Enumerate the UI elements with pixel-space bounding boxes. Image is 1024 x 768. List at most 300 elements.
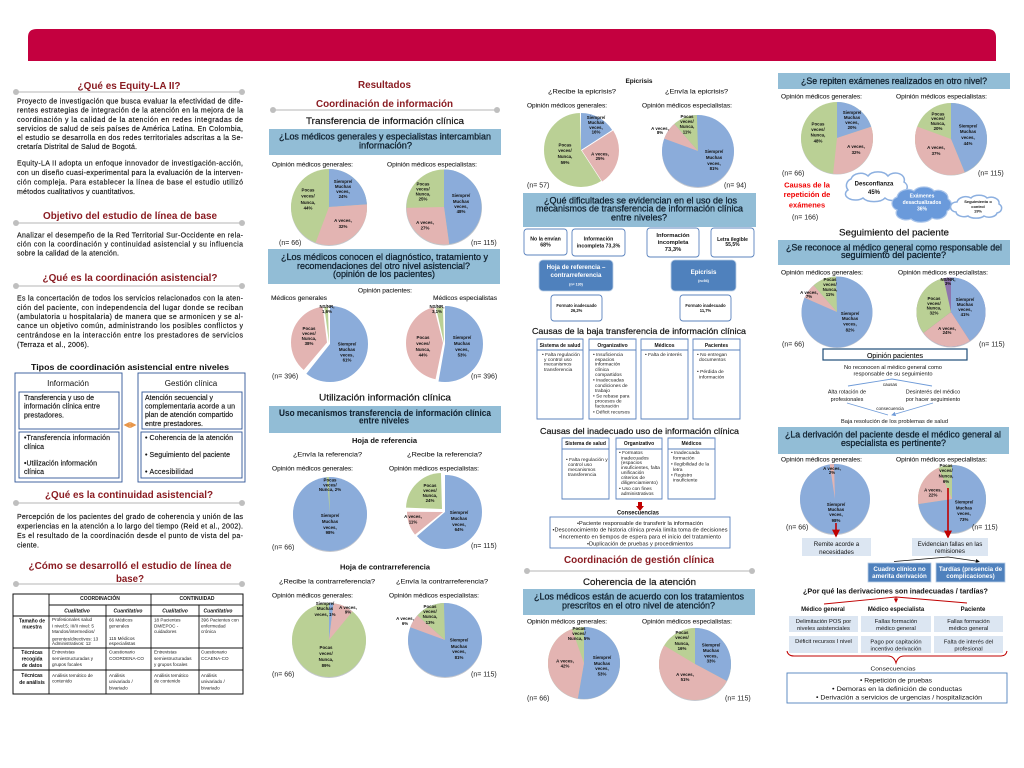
pie chart: envía la contrarreferencia: Siempre/ — [450, 638, 469, 642]
pie chart: recibe la referencia: veces/ — [423, 488, 437, 493]
diagram: tipos de coordinación — [15, 362, 245, 482]
pie chart: exámenes generales: veces, — [845, 120, 859, 125]
panel: causas baja transferencia: procesos de — [595, 398, 622, 404]
table: metodología: Tamaño de — [19, 618, 45, 624]
diagram: opinión pacientes: Alta rotación de — [828, 390, 866, 396]
panel: información: •Transferencia información — [24, 435, 110, 442]
pie chart: envía la epicrisis: ¿Envía la epicrisis? — [665, 88, 728, 96]
pie chart: médicos especialistas pacientes: 3,1% — [432, 309, 442, 314]
callout: causas de la repetición: (n= 166) — [792, 214, 818, 222]
panel: consecuencias derivación: Consecuencias — [870, 666, 916, 672]
panel: causas baja transferencia: Sistema de salud — [540, 343, 580, 349]
table: metodología: gerentes/directivos: 13 — [52, 636, 99, 642]
panel: razones — [789, 607, 1003, 653]
pie chart: médicos generales pacientes: Nunca, — [302, 336, 316, 341]
diagram: dificultades epicrisis: Letra ilegible — [717, 237, 748, 243]
pie chart: seguimiento especialistas: 32% — [930, 310, 938, 316]
pie chart: médicos especialistas pacientes: veces/ — [416, 341, 430, 346]
callout: remite acorde: necesidades — [819, 549, 854, 556]
arrow: red down especialista — [947, 488, 949, 537]
panel: razones: Paciente — [961, 607, 986, 613]
pie chart: envía la epicrisis: veces/ — [680, 119, 694, 124]
pie chart: seguimiento especialistas: 41% — [961, 312, 969, 317]
column 2: resultados — [268, 79, 501, 678]
panel: causas inadecuado uso: unificación — [621, 470, 644, 476]
diagram: opinión pacientes: Baja resolución de los problemas de salud — [841, 419, 948, 425]
pie chart: coherencia generales: 53% — [598, 672, 606, 676]
pie chart: envía la referencia — [272, 452, 367, 552]
pie chart: exámenes especialistas: 20% — [934, 126, 942, 131]
text block: Equity-LA II description — [17, 98, 244, 196]
pie chart: envía la epicrisis: veces, — [707, 161, 721, 166]
diagram: dificultades hoja de referencia: contrarreferencia — [551, 272, 602, 279]
heading: Qué es Equity-LA II: ¿Qué es Equity-LA II? — [78, 80, 180, 92]
pie chart: seguimiento generales: Siempre/ — [841, 311, 860, 316]
pie chart: envía la referencia: Pocas — [324, 478, 337, 482]
heading: Qué es Equity-LA II — [13, 80, 245, 95]
diagram: opinión pacientes: No reconocen al médico general como — [844, 365, 942, 371]
table: metodología: 66 Médicos — [109, 618, 133, 622]
panel: causas baja transferencia: • Pérdida de — [697, 369, 724, 375]
pie chart: médicos generales pacientes: Siempre/ — [338, 342, 357, 346]
diagram: dificultades epicrisis — [647, 228, 754, 321]
pie chart: médicos especialistas pacientes: Siempre/ — [453, 335, 472, 340]
pie chart: exámenes generales — [781, 94, 873, 178]
pie chart: coherencia especialistas: Muchas — [703, 648, 720, 653]
pie chart: médicos especialistas intercambio: veces, — [454, 204, 468, 209]
heading: resultados: Resultados — [358, 79, 411, 91]
heading: objetivo: Objetivo del estudio de línea de base — [43, 210, 217, 222]
pie chart: recibe la epicrisis: Siempre/ — [587, 115, 606, 120]
diagram: opinión pacientes: por hacer seguimiento — [906, 397, 960, 403]
pie chart: exámenes generales: Siempre/ — [843, 110, 862, 115]
box: tardías: complicaciones) — [946, 573, 995, 580]
pie chart: recibe la referencia: Nunca, — [423, 493, 437, 498]
panel: causas baja transferencia: • Déficit recursos — [593, 410, 630, 416]
callout: causas de la repetición — [784, 180, 831, 222]
pie chart: derivación generales: 2% — [829, 470, 835, 475]
pie chart: coherencia generales: Siempre/ — [593, 655, 612, 660]
heading: cómo se desarrolló: base? — [116, 573, 144, 585]
callout: remite acorde: Remite acorde a — [814, 541, 860, 548]
column 3: epicrisis y causas — [523, 78, 756, 702]
label: hoja de referencia: Hoja de referencia — [352, 438, 417, 445]
cloud: exámenes desactualizados: desactualizados — [903, 200, 942, 206]
pie chart: recibe la epicrisis: Pocas — [559, 142, 572, 148]
text block: objetivo: ción con la coordinación y continuidad asistencial y su influencia — [17, 242, 243, 248]
pie chart: envía la referencia: 98% — [326, 530, 334, 535]
pie chart: recibe la referencia: ¿Recibe la referencia? — [407, 452, 482, 458]
pie chart: exámenes generales: A veces, — [847, 144, 865, 149]
panel: conocen diagnóstico: (opinión de los pacientes) — [333, 269, 435, 279]
panel: causas baja transferencia: • Falta regulación — [542, 352, 580, 358]
heading: por qué inadecuadas: ¿Por qué las derivaciones son inadecuadas / tardías? — [803, 586, 988, 596]
diagram: tipos de coordinación: Tipos de coordinación asistencial entre niveles — [31, 362, 229, 372]
table: metodología: semiestructuradas — [154, 656, 192, 661]
cloud: seguimiento o control — [950, 195, 1002, 218]
pie chart: derivación especialistas: veces/ — [939, 468, 953, 473]
cloud: desconfianza — [845, 172, 907, 202]
pie chart: envía la epicrisis: Opinión médicos especialistas: — [642, 102, 732, 110]
panel: causas baja transferencia: documentos — [699, 357, 726, 363]
table: metodología: Cuestionario — [109, 650, 135, 654]
subheading: causas baja transferencia: Causas de la baja transferencia de información clínica — [532, 326, 746, 336]
text block: Equity-LA II description: servicios de salud de seis países de América Latina. En Colombia, — [17, 126, 243, 133]
pie chart: recibe la referencia: veces, — [452, 522, 466, 527]
pie chart: seguimiento especialistas: A veces, — [938, 326, 956, 331]
table: metodología: Cuantitativo — [204, 608, 232, 614]
table: metodología: univariado / — [201, 679, 225, 684]
table: metodología: bivariado — [109, 686, 128, 690]
table: metodología: de análisis — [19, 680, 45, 686]
pie chart: médicos generales intercambio: Muchas — [335, 184, 352, 189]
pie chart: coherencia generales — [527, 618, 620, 702]
table: metodología: generales — [109, 624, 130, 628]
pie chart: médicos generales intercambio: A veces, — [334, 218, 352, 223]
column 4: exámenes, seguimiento, derivación — [778, 73, 1010, 703]
pie chart: derivación especialistas: Muchas — [956, 506, 973, 510]
panel: de acuerdo tratamientos: ¿Los médicos están de acuerdo con los tratamientos — [534, 592, 744, 602]
panel: dificultades — [523, 193, 756, 227]
panel: causas inadecuado uso: diligenciamiento) — [621, 480, 658, 486]
pie chart: derivación generales: A veces, — [823, 466, 841, 471]
panel: causas baja transferencia: Pacientes — [705, 343, 728, 349]
pie chart: recibe la epicrisis: Nunca, — [558, 154, 572, 159]
pie chart: coherencia generales: (n= 66) — [527, 696, 549, 702]
pie chart: médicos generales pacientes: Médicos generales — [271, 295, 328, 302]
panel: se reconoce: seguimiento del paciente? — [841, 250, 946, 260]
text block: coordinación asistencial: (ambulatoria u hospitalaria) de manera que se armonicen y se al- — [17, 314, 244, 321]
diagram: dificultades epicrisis: Información — [656, 233, 690, 239]
label: epicrisis: Epicrisis — [625, 78, 653, 85]
panel: uso mecanismos: entre niveles — [359, 416, 409, 426]
callout: causas de la repetición: Causas de la — [784, 180, 831, 190]
pie chart: recibe la epicrisis: 25% — [596, 156, 604, 161]
text block: Equity-LA II description: cretaría Distrital de Salud de Bogotá. — [17, 144, 137, 151]
cloud: desconfianza: Desconfianza — [855, 182, 894, 188]
text block: Equity-LA II description: rentes estrategias de integración de la atención en la mejora de la — [17, 108, 243, 115]
panel: información: información clínica entre — [24, 404, 100, 410]
panel: causas inadecuado uso — [562, 438, 715, 499]
pie chart: seguimiento especialistas: 3% — [945, 281, 951, 286]
panel: gestión clínica: entre prestadores. — [145, 421, 203, 428]
text block: Equity-LA II description: Proyecto de investigación que busca evaluar la efectividad de dife- — [17, 98, 244, 106]
table: metodología: Profesionales salud — [52, 617, 93, 622]
panel: conocen diagnóstico: ¿Los médicos conocen el diagnóstico, tratamiento y — [281, 252, 488, 262]
pie chart: médicos especialistas intercambio: Siempre/ — [452, 193, 471, 198]
panel: causas baja transferencia: y control uso — [544, 357, 572, 363]
table: metodología: bivariado — [201, 686, 220, 690]
pie chart: coherencia especialistas: (n= 115) — [725, 696, 751, 702]
pie chart: derivación generales: veces, — [829, 512, 843, 517]
panel: conocen diagnóstico — [268, 249, 500, 284]
pie chart: seguimiento especialistas: Nunca, — [927, 306, 941, 310]
pie chart: recibe la referencia: (n= 115) — [471, 543, 497, 550]
heading: objetivo — [13, 210, 245, 226]
table: metodología: Análisis — [109, 673, 126, 678]
pie chart: seguimiento generales: (n= 66) — [782, 342, 804, 348]
panel: consecuencias derivación: • Demoras en la definición de conductas — [832, 686, 963, 693]
pie chart: médicos especialistas intercambio: Pocas — [417, 182, 430, 186]
heading: coordinación de información: Coordinación de información — [316, 98, 453, 110]
pie chart: médicos especialistas intercambio: 48% — [457, 209, 465, 214]
pie chart: derivación especialistas — [896, 456, 998, 534]
panel: de acuerdo tratamientos: prescritos en el otro nivel de atención? — [562, 600, 715, 610]
table: metodología: COORDENA-CO — [109, 656, 144, 661]
table: metodología: Cuestionario — [201, 650, 227, 654]
pie chart: médicos especialistas pacientes: 44% — [419, 352, 427, 358]
pie chart: médicos especialistas intercambio: A veces, — [416, 220, 434, 225]
pie chart: coherencia especialistas: 16% — [678, 646, 686, 651]
pie chart: exámenes especialistas: 37% — [932, 151, 940, 156]
diagram: dificultades epicrisis: (n=94) — [698, 279, 710, 283]
panel: causas inadecuado uso: control uso — [568, 462, 592, 468]
table: metodología: cuidadores — [154, 629, 177, 634]
pie chart: derivación generales: Opinión médicos generales: — [781, 456, 862, 464]
heading: coordinación de información — [270, 98, 500, 113]
pie chart: exámenes generales: (n= 66) — [782, 170, 804, 178]
pie chart: recibe la contrarreferencia: veces, 1% — [314, 612, 336, 617]
pie chart: coherencia generales: veces/ — [572, 631, 586, 636]
panel: causas inadecuado uso: • Uso con fines — [619, 486, 652, 492]
panel: conocen diagnóstico: recomendaciones del otro nivel asistencial? — [297, 261, 470, 271]
callout: evidencian fallas: remisiones — [935, 548, 965, 555]
pie chart: envía la epicrisis — [642, 88, 746, 190]
subheading: seguimiento: Seguimiento del paciente — [839, 228, 949, 238]
panel: se reconoce: ¿Se reconoce al médico general como responsable del — [786, 242, 1002, 252]
pie chart: exámenes especialistas: veces/ — [931, 116, 945, 121]
pie chart: derivación especialistas: Opinión médicos especialistas: — [896, 456, 987, 464]
pie chart: envía la contrarreferencia: A veces, — [396, 616, 414, 621]
panel: consecuencias: •Duplicación de pruebas y procedimientos — [587, 542, 693, 548]
panel: causas baja transferencia: • Insuficiencia — [593, 352, 623, 358]
table: metodología: contenido — [52, 678, 72, 684]
text block: objetivo: sobre la calidad de la atención. — [17, 250, 119, 258]
table: metodología: Análisis temático — [154, 673, 189, 678]
pie chart: derivación generales: (n= 66) — [786, 524, 808, 532]
cloud: exámenes desactualizados: Exámenes — [910, 194, 935, 200]
panel: derivación pertinente: ¿La derivación del paciente desde el médico general al — [785, 430, 1001, 440]
pie chart: envía la contrarreferencia: veces, — [452, 649, 466, 654]
pie chart: exámenes especialistas: Pocas — [932, 112, 945, 116]
panel: razones: profesional — [954, 646, 983, 652]
pie chart: recibe la contrarreferencia — [272, 578, 375, 678]
box: cuadro clínico: Cuadro clínico no — [873, 566, 926, 573]
callout: causas de la repetición: repetición de — [784, 190, 830, 199]
pie chart: exámenes especialistas: 44% — [964, 141, 972, 146]
table: metodología: I nivel:5; III/II nivel: 5 — [52, 624, 94, 628]
diagram: dificultades hoja de referencia: (n= 130) — [569, 282, 584, 286]
table: metodología: DM/EPOC - — [154, 624, 179, 628]
pie chart: médicos especialistas intercambio: 25% — [419, 196, 427, 202]
pie chart: seguimiento especialistas: veces, — [958, 307, 972, 312]
heading: coordinación asistencial: ¿Qué es la coordinación asistencial? — [42, 272, 218, 284]
panel: razones: Médico especialista — [868, 607, 925, 613]
panel: consecuencias: Consecuencias — [617, 510, 660, 516]
table: metodología: Análisis — [201, 673, 218, 678]
panel: información: clínica — [24, 469, 44, 476]
panel: se reconoce — [778, 240, 1010, 265]
pie chart: médicos especialistas intercambio: veces/ — [416, 186, 430, 192]
pie chart: coherencia especialistas: Pocas — [676, 630, 689, 635]
pie chart: exámenes generales: Nunca, — [811, 132, 825, 138]
pie chart: médicos generales intercambio: (n= 66) — [279, 240, 301, 247]
panel: información: prestadores. — [24, 412, 64, 420]
box: tardías: Tardías (presencia de — [939, 566, 1003, 573]
panel: causas baja transferencia: condiciones de — [595, 383, 628, 389]
table: metodología: de datos — [22, 663, 42, 669]
table: metodología: COORDINACIÓN — [80, 594, 120, 602]
panel: gestión clínica: complementaria acorde a un — [145, 404, 235, 410]
pie chart: envía la referencia: veces/ — [323, 482, 337, 488]
pie chart: derivación especialistas: 6% — [943, 479, 949, 484]
text block: Equity-LA II description: métodos cualitativos y cuantitativos. — [17, 189, 135, 196]
pie chart: seguimiento especialistas: 24% — [943, 330, 951, 335]
panel: causas inadecuado uso: insuficiente — [673, 478, 698, 484]
panel: consecuencias derivación: • Repetición de pruebas — [860, 678, 933, 684]
panel: gestión clínica: • Accesibilidad — [145, 469, 193, 476]
pie chart: médicos generales pacientes: Pocas — [303, 326, 316, 331]
pie chart: derivación especialistas: Nunca, — [939, 474, 953, 478]
label: opinión pacientes: Opinión pacientes: — [358, 288, 412, 294]
panel: uso mecanismos — [269, 406, 501, 433]
pie chart: recibe la epicrisis: Opinión médicos generales: — [527, 102, 607, 110]
panel: consecuencias: •Paciente responsable de transferir la información — [577, 521, 703, 527]
panel: dificultades: ¿Qué dificultades se evidencian en el uso de los — [544, 196, 737, 206]
callout: evidencian fallas: Evidencian fallas en las — [918, 541, 982, 548]
pie chart: médicos especialistas pacientes: Nunca, — [416, 347, 430, 352]
text block: continuidad: experiencias en la atención a lo largo del tiempo (Reid et al., 2002). — [17, 524, 243, 530]
table: metodología: univariado / — [109, 679, 133, 684]
pie chart: médicos generales intercambio: Pocas — [302, 188, 315, 192]
pie chart: recibe la referencia: 64% — [455, 527, 463, 532]
panel: razones: incentivo derivación — [871, 646, 921, 652]
pie chart: coherencia generales: Nunca, 5% — [568, 636, 590, 641]
panel: causas inadecuado uso: mecanismos — [568, 467, 596, 473]
text block: continuidad: ciente. — [17, 542, 39, 550]
heading: coordinación asistencial — [13, 272, 245, 289]
diagram: dificultades hoja de referencia: Información — [584, 236, 613, 242]
pie chart: derivación especialistas: Pocas — [940, 463, 953, 468]
table: metodología: muestra — [22, 624, 42, 630]
panel: de acuerdo tratamientos — [523, 589, 755, 615]
pie chart: envía la referencia: Opinión médicos generales: — [272, 466, 353, 472]
pie chart: exámenes generales: 20% — [848, 125, 856, 130]
cloud: seguimiento o control: 19% — [974, 208, 982, 214]
pie chart: exámenes generales: Muchas — [844, 115, 861, 120]
heading: cómo se desarrolló — [13, 560, 245, 587]
box: cuadro clínico: amerita derivación — [872, 573, 927, 580]
pie chart: envía la contrarreferencia: Nunca, — [423, 614, 437, 619]
panel: consecuencias: •Desconocimiento de historia clínica previa limita toma de decisiones — [552, 528, 728, 534]
panel: derivación pertinente: especialista es pertinente? — [841, 438, 946, 448]
pie chart: envía la epicrisis: 11% — [683, 130, 691, 134]
pie chart: envía la contrarreferencia: ¿Envía la contrarreferencia? — [396, 578, 488, 586]
panel: gestión clínica: Gestión clínica — [165, 379, 218, 388]
table: metodología — [13, 594, 243, 694]
pie chart: recibe la referencia: A veces, — [404, 514, 422, 519]
pie chart: recibe la epicrisis: A veces, — [591, 152, 609, 156]
pie chart: seguimiento generales: Pocas — [824, 277, 837, 282]
pie chart: médicos generales intercambio: 24% — [339, 194, 347, 199]
pie chart: envía la contrarreferencia: (n= 115) — [471, 672, 497, 678]
pie chart: médicos especialistas pacientes: Muchas — [454, 341, 471, 346]
pie chart: envía la epicrisis: Nunca, — [680, 124, 694, 129]
pie chart: derivación generales: Siempre/ — [827, 502, 846, 507]
pie chart: derivación generales: 98% — [832, 518, 840, 523]
panel: causas baja transferencia: • Se rebase para — [593, 394, 630, 400]
panel: razones: médico general — [949, 626, 988, 632]
pie chart: seguimiento generales: veces/ — [823, 282, 837, 287]
pie chart: coherencia generales: Muchas — [594, 661, 611, 666]
text block: Equity-LA II description: ción compleja. Para establecer la línea de base el estudio utilizó — [17, 180, 243, 186]
pie chart: médicos especialistas pacientes — [416, 295, 498, 380]
pie chart: seguimiento generales: 82% — [846, 328, 854, 332]
box: cuadro clínico — [868, 563, 931, 582]
pie chart: médicos generales intercambio — [272, 162, 367, 247]
pie chart: envía la epicrisis: Pocas — [681, 114, 694, 119]
panel: información — [15, 373, 122, 482]
header bar — [28, 29, 996, 61]
panel: causas baja transferencia: transferencia — [544, 367, 573, 373]
table: metodología: especialistas — [109, 641, 136, 646]
pie chart: coherencia especialistas: Opinión médicos especialistas: — [642, 618, 732, 626]
pie chart: recibe la contrarreferencia: ¿Recibe la contrarreferencia? — [279, 578, 375, 586]
panel: razones: Falta de interés del — [944, 640, 993, 646]
pie chart: envía la referencia: Nunca, 2% — [319, 487, 341, 492]
panel: causas inadecuado uso: inadecuados — [621, 456, 649, 462]
panel: causas baja transferencia: compartidos — [595, 372, 622, 378]
cloud: exámenes desactualizados: 36% — [917, 206, 928, 212]
panel: causas inadecuado uso: transferencia — [568, 472, 597, 478]
panel: causas baja transferencia: Médicos — [654, 343, 675, 349]
diagram: dificultades hoja de referencia: Formato inadecuado — [556, 303, 597, 308]
arrow: double arrow — [125, 424, 135, 426]
table: metodología: de contenido — [154, 678, 181, 684]
arrow: down red — [636, 502, 644, 511]
text block: objetivo — [17, 232, 244, 258]
pie chart: exámenes especialistas: Nunca, — [931, 121, 945, 126]
panel: causas inadecuado uso: Sistema de salud — [565, 441, 606, 447]
panel: causas inadecuado uso: • Formatos — [619, 450, 643, 456]
panel: información: clínica — [24, 444, 44, 451]
panel: razones: Fallas formación — [947, 619, 990, 625]
pie chart: envía la epicrisis: 8% — [657, 130, 663, 135]
pie chart: recibe la contrarreferencia: 9% — [345, 610, 351, 614]
text block: Equity-LA II description: coordinación y la calidad de la atención en redes integradas de — [17, 117, 243, 124]
pie chart: médicos generales pacientes: veces/ — [302, 331, 316, 336]
cloud: seguimiento o control: control — [971, 204, 985, 209]
panel: información: Transferencia y uso de — [24, 395, 94, 402]
pie chart: médicos generales intercambio: Opinión médicos generales: — [272, 162, 353, 168]
subheading: utilización: Utilización información clínica — [319, 392, 452, 404]
pie chart: recibe la contrarreferencia: Pocas — [320, 645, 333, 650]
table: metodología: Técnicas — [21, 650, 43, 656]
pie chart: derivación generales: Muchas — [828, 507, 845, 512]
pie chart: seguimiento generales: 7% — [806, 294, 812, 299]
pie chart: seguimiento especialistas: Siempre/ — [956, 297, 975, 302]
table: metodología: Cualitativo — [162, 608, 188, 614]
pie chart: derivación especialistas: Siempre/ — [955, 500, 974, 504]
text block: coordinación asistencial: (Terraza et al., 2006). — [17, 342, 89, 349]
arrows: evidencia a fallas — [894, 557, 979, 562]
panel: gestión clínica — [138, 373, 245, 482]
pie chart: seguimiento generales: A veces, — [800, 290, 818, 295]
pie chart: médicos generales intercambio: veces/ — [301, 194, 315, 198]
pie chart: exámenes generales: Pocas — [812, 122, 825, 126]
diagram: opinión pacientes: profesionales — [831, 397, 864, 403]
pie chart: médicos generales pacientes: NS/NR, — [320, 304, 334, 309]
